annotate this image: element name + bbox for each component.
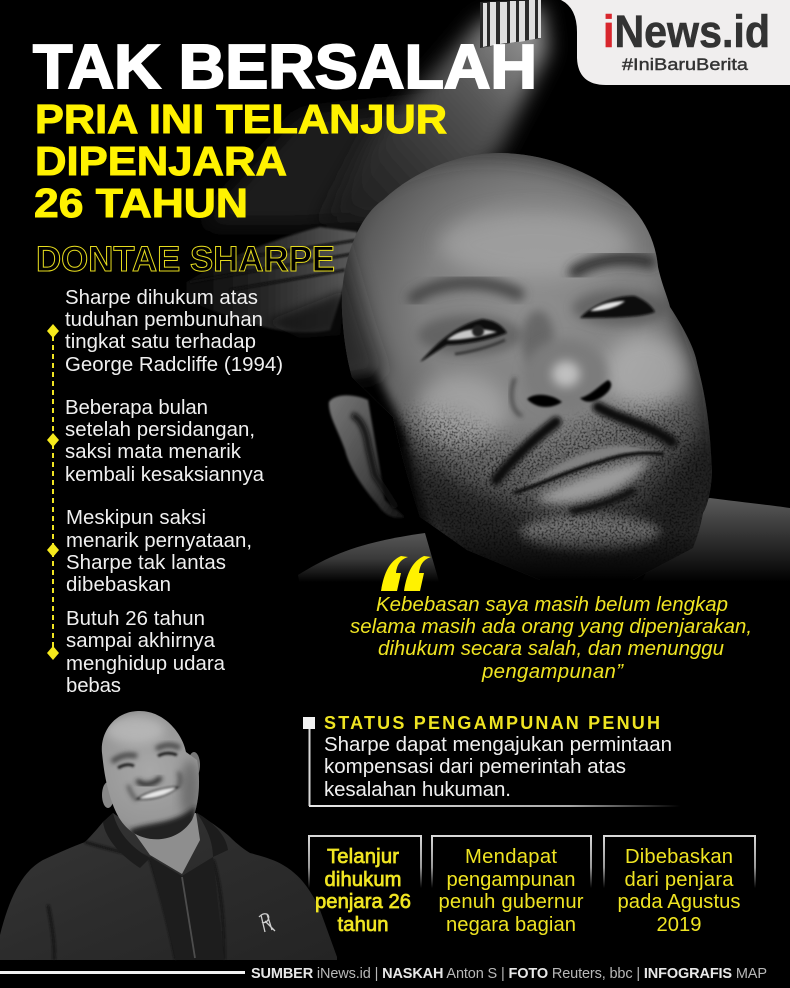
text block: point 1: George Radcliffe (1994) <box>65 354 283 376</box>
footer <box>0 966 767 982</box>
chin fade <box>458 534 694 580</box>
moustache <box>496 407 672 480</box>
smile <box>137 787 178 799</box>
timeline line and markers <box>47 324 59 660</box>
text block: point 2 <box>65 397 265 486</box>
lower face beard <box>412 436 711 559</box>
text block: point 1: tuduhan pembunuhan <box>65 309 263 331</box>
top shading <box>418 153 628 204</box>
eyes <box>118 753 177 768</box>
cheek highlights <box>603 334 687 410</box>
nose <box>511 339 611 416</box>
text block: point 3: Sharpe tak lantas <box>66 552 226 574</box>
text block: point 3: dibebaskan <box>66 574 171 596</box>
status text <box>324 733 672 801</box>
quote text: Kebebasan saya masih belum lengkap <box>376 594 728 616</box>
logo wordmark: iNews.id <box>603 6 770 57</box>
text block: point 4: menghidup udara <box>66 653 226 675</box>
eye sockets <box>418 315 522 355</box>
marker 2 <box>47 433 59 447</box>
info box 3: dari penjara <box>624 869 734 891</box>
text block: point 3: Meskipun saksi <box>66 507 206 529</box>
collar <box>103 813 228 868</box>
nose <box>137 777 161 784</box>
text block: point 4: bebas <box>66 675 121 697</box>
zipper <box>182 877 195 958</box>
info box 3 <box>604 836 755 936</box>
stipple texture <box>398 396 712 556</box>
text block: point 1: tingkat satu terhadap <box>65 331 256 353</box>
subtitle: DIPENJARA <box>35 138 287 184</box>
chin patch <box>520 514 660 550</box>
quote text: dihukum secara salah, dan menunggu <box>378 638 724 660</box>
marker 4 <box>47 646 59 660</box>
right edge shadow <box>662 288 710 452</box>
right ear <box>188 752 200 778</box>
head <box>342 153 712 580</box>
text block: point 4: sampai akhirnya <box>66 630 216 652</box>
ear <box>329 395 405 518</box>
hoodie logo <box>259 914 275 932</box>
credits: SUMBER iNews.id | NASKAH Anton S | FOTO Reuters, bbc | INFOGRAFIS MAP <box>251 966 767 982</box>
shoulder right <box>640 498 790 585</box>
status heading: STATUS PENGAMPUNAN PENUH <box>324 713 660 733</box>
cell background: window, light ray and bed <box>170 0 548 338</box>
marker 3 <box>47 543 59 557</box>
info box 2: pengampunan <box>446 869 576 891</box>
subtitle: 26 TAHUN <box>34 180 248 226</box>
right brow <box>575 259 650 272</box>
quote text: selama masih ada orang yang dipenjarakan, <box>350 616 752 638</box>
left ear <box>102 782 114 808</box>
info box 2: negara bagian <box>446 914 576 936</box>
under lip shadow <box>570 490 635 512</box>
info box 1: dihukum <box>324 869 402 891</box>
left eye <box>420 319 507 362</box>
left brow <box>414 283 518 298</box>
neck <box>125 813 200 874</box>
info box 1: penjara 26 <box>315 891 411 913</box>
logo tagline: #IniBaruBerita <box>622 55 749 74</box>
marker 1 <box>47 324 59 338</box>
info box 3: 2019 <box>656 914 702 936</box>
info box 3: Dibebaskan <box>625 846 733 868</box>
small head <box>102 711 200 840</box>
text block: point 1 <box>65 287 283 376</box>
small portrait <box>0 705 337 960</box>
info box 2: Mendapat <box>465 846 557 868</box>
quote text: pengampunan” <box>481 661 624 683</box>
beard <box>128 805 196 840</box>
text block: point 4: Butuh 26 tahun <box>66 608 205 630</box>
text block: point 2: setelah persidangan, <box>65 419 255 441</box>
subtitle <box>34 96 447 226</box>
text block: point 3: menarik pernyataan, <box>66 530 252 552</box>
right eye <box>580 296 655 318</box>
status panel <box>303 713 680 807</box>
text block: point 2: kembali kesaksiannya <box>65 464 265 486</box>
status marker <box>303 717 315 729</box>
info box 1: tahun <box>338 914 388 936</box>
text block: point 2: saksi mata menarik <box>65 441 242 463</box>
ear inner <box>352 415 396 508</box>
shoulder left <box>298 533 440 585</box>
status text: kompensasi dari pemerintah atas <box>324 755 626 778</box>
subtitle: PRIA INI TELANJUR <box>35 96 447 142</box>
forehead highlights <box>440 211 630 279</box>
shadow under brow and cheek <box>180 760 200 820</box>
text block: point 4 <box>66 608 226 697</box>
quote text <box>350 594 752 683</box>
text block: point 1: Sharpe dihukum atas <box>65 287 258 309</box>
left shadow side <box>350 367 432 525</box>
info box 1 <box>309 836 421 936</box>
portrait: main face <box>298 140 790 590</box>
quote mark icon <box>381 556 431 591</box>
mouth line <box>514 453 664 493</box>
brows <box>112 745 180 762</box>
hoodie <box>0 813 337 960</box>
info box 3: pada Agustus <box>618 891 740 913</box>
info box 1: Telanjur <box>327 846 399 868</box>
status text: Sharpe dapat mengajukan permintaan <box>324 733 672 756</box>
info box 2: penuh gubernur <box>438 891 584 913</box>
hoodie folds <box>48 842 224 960</box>
lower lip <box>535 458 650 503</box>
status text: kesalahan hukuman. <box>324 778 511 801</box>
logo panel <box>561 0 790 85</box>
text block: point 2: Beberapa bulan <box>65 397 208 419</box>
upper lip <box>525 445 665 485</box>
title: TAK BERSALAH <box>33 33 537 102</box>
name outlined: DONTAE SHARPE <box>36 240 335 279</box>
inner hoodie <box>150 857 224 960</box>
text block: point 3 <box>66 507 252 596</box>
info box 2 <box>432 836 591 936</box>
